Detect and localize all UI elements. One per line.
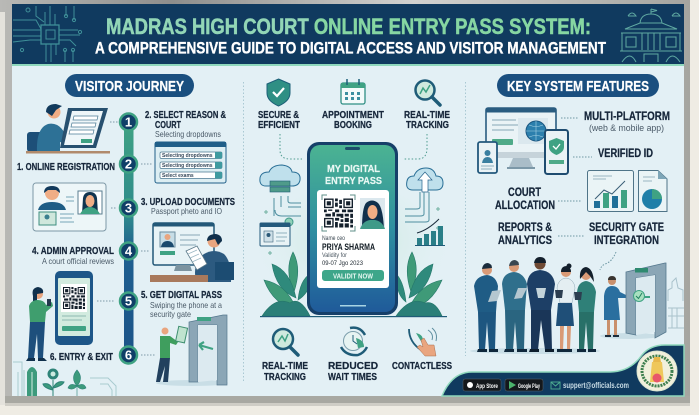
label: step 2: 2. SELECT REASON & [145,109,226,121]
illustration: right plant [396,252,442,316]
illustration: woman with phone [26,287,53,361]
illustration: security gate right [626,263,666,338]
label: step 4 [32,245,114,266]
label: real-time tracking bottom: TRACKING [264,371,306,383]
label: contactless: CONTACTLESS [392,360,452,372]
heading: my digital entry pass: ENTRY PASS [325,175,382,187]
step numbers: 1 [125,114,132,130]
timeline bar [124,122,134,355]
illustration: devices [478,108,568,174]
label: multi-platform: MULTI-PLATFORM [584,109,670,123]
label: step 5: 5. GET DIGITAL PASS [141,289,222,301]
label: real-time tracking top: REAL-TIME [404,109,450,121]
icon: shield [267,79,290,106]
heading pill: visitor journey: VISITOR JOURNEY [75,79,184,95]
label: real-time tracking bottom [262,360,308,383]
panel: visitor journey [13,74,235,396]
pass details: Validity for [322,253,347,259]
title: MADRAS HIGH COURT ONLINE ENTRY PASS SYSTEM: [106,14,591,39]
label: reports and analytics: ANALYTICS [498,233,552,247]
label: real-time tracking top: TRACKING [406,119,449,131]
illustration: admin at monitor [150,223,234,282]
heading pill: visitor journey [65,74,194,97]
person 2 [502,260,527,352]
label: appointment booking: APPOINTMENT [322,109,384,121]
step numbers: 3 [125,200,132,216]
label: step 5 [141,289,222,319]
label: step 5: Swiping the phone at a [150,300,222,310]
step numbers: 4 [125,244,133,258]
label: step 2 [145,109,226,139]
panel: centre benefits [247,79,457,383]
illustration: security gate with man [156,315,228,386]
connectors to phone [280,134,427,159]
icon: circuit chip [13,6,82,62]
glow behind phone [247,165,457,315]
label: appointment booking: BOOKING [334,119,372,131]
illustration: phone with qr [55,271,93,345]
person 1 [474,263,501,352]
heading: my digital entry pass [325,163,382,187]
icon: courthouse [620,9,682,62]
step numbers: 2 [125,156,132,172]
icon: magnifier bottom [273,329,298,355]
label: real-time tracking top [404,109,450,131]
label: security gate integration: SECURITY GATE [589,220,664,234]
label: step 6: 6. ENTRY & EXIT [50,351,113,363]
step numbers: 5 [125,294,132,308]
pass details [322,236,375,267]
heading pill: key system features: KEY SYSTEM FEATURES [507,79,649,95]
label: reduced wait times: REDUCED [328,360,378,372]
label: court allocation [495,185,555,212]
label: court allocation: ALLOCATION [495,198,555,212]
step numbers [120,114,137,364]
button: validit now: VALIDIT NOW [333,272,374,280]
label: multi-platform [584,109,670,133]
dropdown card: Selecting dropdowns [162,163,213,169]
header band [12,4,684,66]
label: step 3 [141,196,235,216]
icon: calendar [341,79,365,104]
dividers [244,82,466,382]
emblem [637,351,677,391]
label: step 2: COURT [155,119,181,131]
label: verified id: VERIFIED ID [598,146,653,160]
label: real-time tracking bottom: REAL-TIME [262,360,308,372]
badge: google play [505,379,543,391]
step numbers: 6 [125,348,132,362]
label: reduced wait times: WAIT TIMES [328,371,377,383]
illustration: id document and portraits [33,183,106,231]
icon: reduced wait clock [341,328,367,355]
heading: my digital entry pass: MY DIGITAL [327,163,381,175]
label: appointment booking [322,109,384,131]
illustration: team of officials [470,257,600,354]
label: step 5: security gate [150,309,191,319]
subtitle: A COMPREHENSIVE GUIDE TO DIGITAL ACCESS AND VISITOR MANAGEMENT [95,40,606,58]
illustration: person registering at tablet [26,104,110,154]
label: reduced wait times [328,360,378,383]
portrait [360,198,385,229]
label: security gate integration [589,220,664,247]
timeline connectors [97,122,155,355]
icon: envelope [551,382,560,389]
person 3 [527,257,555,352]
person 5 [574,267,596,352]
label: court allocation: COURT [508,185,542,199]
badge: app store: App Store [476,383,498,390]
label: multi-platform: (web & mobile app) [589,123,664,133]
label: reports and analytics: REPORTS & [498,220,552,234]
label: step 3: 3. UPLOAD DOCUMENTS [141,196,235,208]
label: step 2: Selecting dropdowns [155,129,221,139]
dropdown card: Select exams [162,173,194,179]
illustration: document pie chart [638,170,667,212]
support email: suppert@officials.com [563,381,629,390]
label: secure and efficient: EFFICIENT [258,119,300,131]
illustration: phone digital pass [307,142,398,315]
dropdown card [155,142,226,183]
footer band [442,345,684,396]
badge: app store [463,379,501,391]
illustration: report chart card [588,170,634,212]
label: step 4: 4. ADMIN APPROVAL [32,245,114,257]
qr code [322,195,355,231]
label: secure and efficient: SECURE & [258,109,299,121]
pass card [317,190,389,288]
label: reports and analytics [498,220,552,247]
heading pill: key system features [497,74,659,97]
icon: contactless hand [409,328,436,356]
label: step 1: 1. ONLINE REGISTRATION [17,161,115,173]
connectors [558,118,616,270]
label: secure and efficient [258,109,300,131]
pass details: PRIYA SHARMA [322,242,375,252]
label: step 4: A court official reviews [42,256,114,266]
decoration: skyline [668,278,684,328]
panel: key system features [470,74,684,354]
illustration: right cloud and growth chart [405,168,445,246]
id card small [260,218,293,246]
dropdown card: Selecting dropdowns [162,153,213,159]
decoration: plants bottom left [13,362,116,396]
pass details: 09-07 Jgo 2023 [322,260,363,267]
label: security gate integration: INTEGRATION [594,233,659,247]
illustration: left cloud servers [260,165,301,255]
badge: google play: Google Play [518,383,540,390]
label: step 3: Passport pheto and IO [151,206,222,216]
pass details: Name ceo [322,236,346,242]
illustration: woman at gate [600,276,660,339]
person 4 [555,264,575,352]
icon: magnifier top [416,80,440,105]
illustration: left plant [262,252,312,316]
